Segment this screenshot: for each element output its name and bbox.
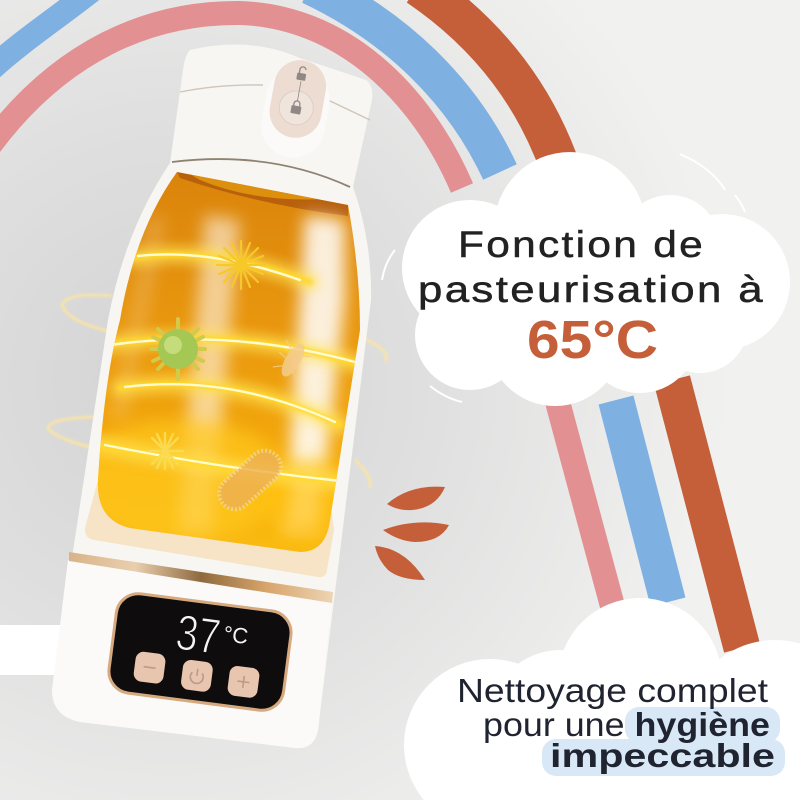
gold band <box>69 552 333 603</box>
bottle base shade <box>52 560 332 748</box>
blue arc upper <box>310 0 500 172</box>
cap seams <box>180 85 370 120</box>
gold tone <box>70 420 290 540</box>
heading: pasteurisation: pasteurisation à <box>418 269 765 310</box>
liquid <box>98 172 360 552</box>
heat swirls <box>100 254 360 482</box>
bottle <box>48 45 386 748</box>
cloud accent strokes <box>382 154 745 402</box>
lock surround <box>256 63 335 163</box>
germ: small star <box>147 433 183 469</box>
lock knob <box>277 88 316 128</box>
bottom cloud <box>404 598 800 800</box>
caption: hygiene: pour une hygiène <box>483 706 770 743</box>
glass base <box>85 480 334 577</box>
pink arc upper <box>0 13 462 188</box>
germ: bacillus <box>213 444 287 516</box>
lock button <box>256 55 336 163</box>
rainbow arcs <box>0 0 742 648</box>
display panel <box>106 591 294 713</box>
caption: hygiene: Nettoyage complet <box>457 672 768 709</box>
motion marks <box>375 487 449 580</box>
germ: green virus <box>151 319 205 379</box>
bottle body <box>52 45 372 748</box>
rust arc lower <box>672 380 742 648</box>
germ: yellow star <box>217 241 265 289</box>
blue arc lower <box>616 400 668 602</box>
upper cloud <box>382 152 790 406</box>
heading: pasteurisation <box>418 224 765 310</box>
white strip <box>0 625 60 675</box>
lock slider <box>265 56 330 142</box>
temperature reading: 37 <box>173 604 224 665</box>
highlights <box>542 707 785 776</box>
power button <box>180 659 214 693</box>
liquid surface <box>177 172 348 216</box>
plus button <box>227 665 260 699</box>
rust arc upper <box>418 0 566 185</box>
caption: hygiene <box>457 672 775 774</box>
heading: pasteurisation: Fonction de <box>458 224 705 265</box>
ring glow left <box>48 295 386 488</box>
lock icons <box>290 66 308 115</box>
temperature value: 65°C <box>527 310 658 370</box>
unit: °C <box>222 621 250 649</box>
shoulder seam <box>172 159 350 187</box>
minus button <box>133 651 166 684</box>
pink arc lower <box>553 385 613 608</box>
germ: mite <box>270 336 314 383</box>
light bands <box>112 215 345 530</box>
blue arc left <box>0 0 95 72</box>
caption: hygiene: impeccable <box>550 737 775 774</box>
